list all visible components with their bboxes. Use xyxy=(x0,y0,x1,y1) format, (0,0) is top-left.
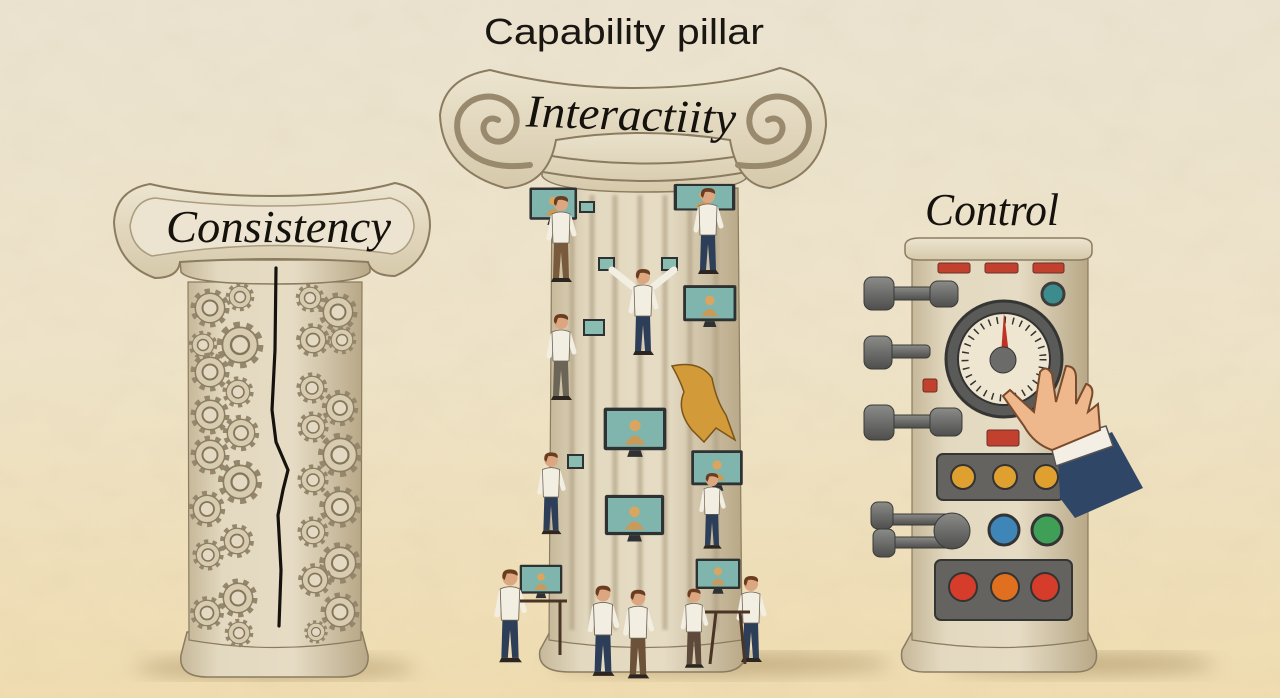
interactivity capital xyxy=(440,68,826,188)
hand xyxy=(1003,366,1100,450)
suit sleeve xyxy=(1058,432,1143,518)
seated person left xyxy=(683,589,706,668)
gears on shaft xyxy=(191,285,359,645)
button panel top xyxy=(937,454,1064,500)
red indicators xyxy=(923,263,1064,446)
neck rings xyxy=(543,155,747,181)
person at monitor xyxy=(701,473,723,549)
consistency label: Consistency xyxy=(166,201,392,252)
button panel bottom xyxy=(935,560,1072,620)
consistency shaft xyxy=(188,282,362,648)
control label: Control xyxy=(925,184,1059,235)
gauge xyxy=(946,301,1062,417)
control top xyxy=(905,238,1092,260)
golden ornament xyxy=(672,364,735,442)
interactivity shaft xyxy=(549,188,742,648)
blue and green buttons xyxy=(989,515,1062,545)
interactivity label: Interactiity xyxy=(524,85,737,144)
desks xyxy=(520,601,750,664)
person with backpack xyxy=(540,452,563,534)
interactivity base xyxy=(540,628,746,672)
person centre arms spread xyxy=(612,269,674,355)
consistency base xyxy=(181,632,368,677)
tablets xyxy=(568,202,677,468)
crack line xyxy=(272,268,288,626)
person talking second xyxy=(626,590,651,678)
person with tablet xyxy=(549,314,574,400)
ground shadows xyxy=(135,653,1215,679)
title: Capability pillar xyxy=(484,11,764,52)
flutes xyxy=(572,195,716,630)
capital neck xyxy=(542,125,748,192)
pillar: interactivity xyxy=(440,68,826,678)
pillar: consistency xyxy=(114,183,430,677)
control base xyxy=(901,632,1097,672)
consistency capital xyxy=(114,183,430,278)
seated person right xyxy=(739,576,764,662)
person at desk left xyxy=(497,569,524,662)
levers xyxy=(864,277,970,557)
right volute xyxy=(738,97,809,166)
teal knob xyxy=(1042,283,1064,305)
people xyxy=(497,188,764,678)
person talking xyxy=(590,586,617,676)
person climbing top right xyxy=(696,188,721,274)
consistency neck rings xyxy=(180,260,370,284)
pillar: control xyxy=(864,184,1143,672)
control shaft xyxy=(912,250,1088,648)
monitors xyxy=(520,184,743,598)
left volute xyxy=(457,97,530,166)
person climbing top left xyxy=(549,196,574,282)
shirt cuff xyxy=(1050,426,1113,466)
